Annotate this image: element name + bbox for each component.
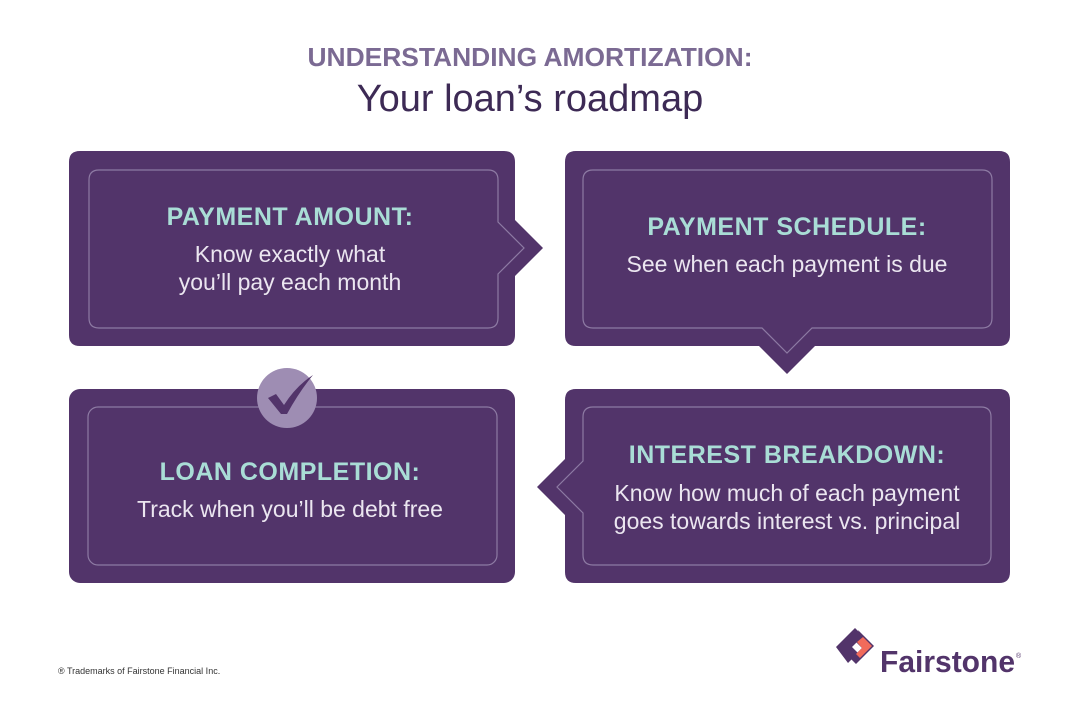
panel: payment amount: Know exactly what [195,241,386,267]
panel: interest breakdown: goes towards interest vs. principal [614,508,960,534]
panel: payment schedule: PAYMENT SCHEDULE: [647,213,927,241]
icon: checkmark badge [257,368,317,428]
panel: payment amount: you’ll pay each month [179,269,401,295]
title: Your loan’s roadmap [357,78,703,120]
logo: Fairstone: Fairstone [880,644,1015,679]
panel: interest breakdown [537,389,1010,583]
footnote: ® Trademarks of Fairstone Financial Inc. [58,666,220,676]
title [308,42,752,120]
logo: Fairstone: ® [1016,652,1022,660]
panel: loan completion: Track when you’ll be debt free [137,496,443,522]
panel: payment amount [69,151,543,346]
panel: interest breakdown: INTEREST BREAKDOWN: [629,441,945,469]
title: UNDERSTANDING AMORTIZATION: [308,42,752,72]
panel: payment schedule: See when each payment is due [627,251,947,277]
panel: loan completion [69,389,515,583]
panel: payment amount: PAYMENT AMOUNT: [167,203,413,231]
logo: Fairstone [836,628,1022,679]
panel: payment schedule [565,151,1010,374]
panel: interest breakdown: Know how much of each payment [614,480,960,506]
panel: loan completion: LOAN COMPLETION: [160,458,420,486]
